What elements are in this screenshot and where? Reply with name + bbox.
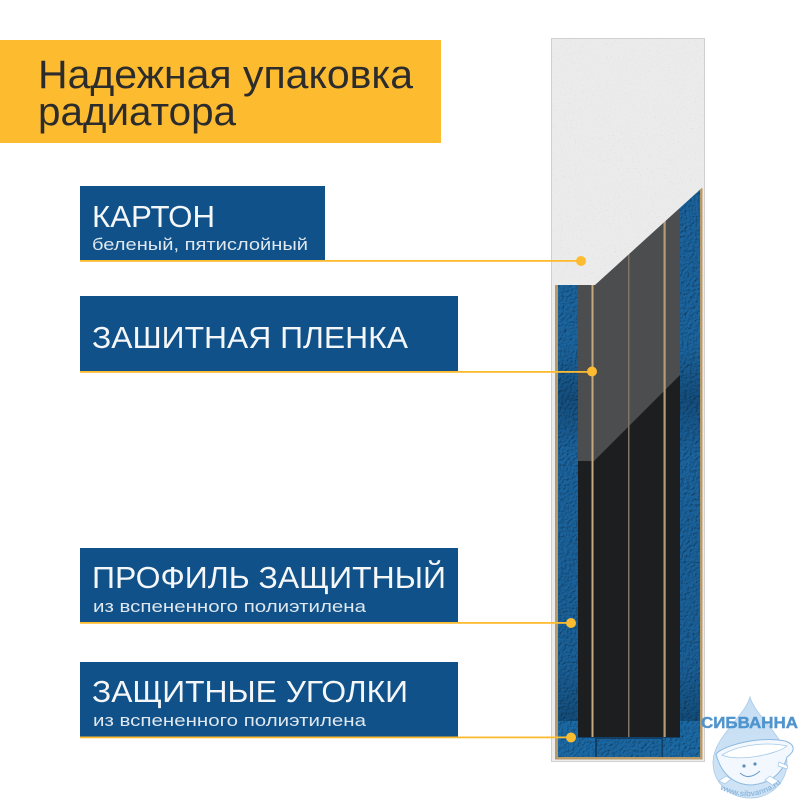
label: protective film	[80, 296, 458, 371]
protective film	[578, 185, 680, 461]
logo: Sibvanna	[701, 696, 798, 798]
leader line: protective corners	[80, 732, 576, 742]
logo url: www.sibvanna.ru	[721, 780, 781, 796]
foam profile bottom middle	[597, 739, 662, 757]
foam corner bottom left	[558, 721, 595, 757]
logo wordmark: СИБВАННА	[701, 715, 798, 732]
label: protective corners: из вспененного полиэтилена	[93, 711, 367, 730]
foam profile right	[680, 185, 700, 721]
label: cardboard: КАРТОН	[92, 199, 215, 234]
foam corner bottom right	[663, 721, 700, 757]
radiator package illustration	[552, 38, 704, 762]
leader line: cardboard	[80, 256, 586, 266]
cardboard cover	[552, 39, 704, 285]
radiator body	[578, 285, 680, 737]
label: cardboard	[80, 186, 325, 260]
icon: bathtub	[716, 740, 793, 786]
title text	[38, 53, 414, 134]
title text: радиатора	[38, 90, 237, 134]
label: foam profile: ПРОФИЛЬ ЗАЩИТНЫЙ	[92, 559, 446, 595]
kraft cardboard inner edge	[555, 188, 702, 760]
foam bottom backing	[578, 737, 680, 757]
label: foam profile	[80, 548, 458, 622]
label: foam profile: из вспененного полиэтилена	[93, 597, 367, 616]
icon: water drop	[713, 697, 787, 798]
label: protective corners	[80, 662, 458, 736]
radiator fin lines	[592, 220, 666, 737]
leader line: foam profile	[80, 618, 576, 628]
label: protective film: ЗАШИТНАЯ ПЛЕНКА	[92, 320, 408, 355]
outer package edge	[552, 38, 704, 762]
foam profile left	[558, 285, 578, 721]
label: protective corners: ЗАЩИТНЫЕ УГОЛКИ	[92, 674, 408, 709]
title banner	[0, 40, 441, 143]
leader line: protective film	[80, 366, 597, 376]
label: cardboard: беленый, пятислойный	[92, 235, 308, 254]
title text: Надежная упаковка	[38, 53, 414, 97]
